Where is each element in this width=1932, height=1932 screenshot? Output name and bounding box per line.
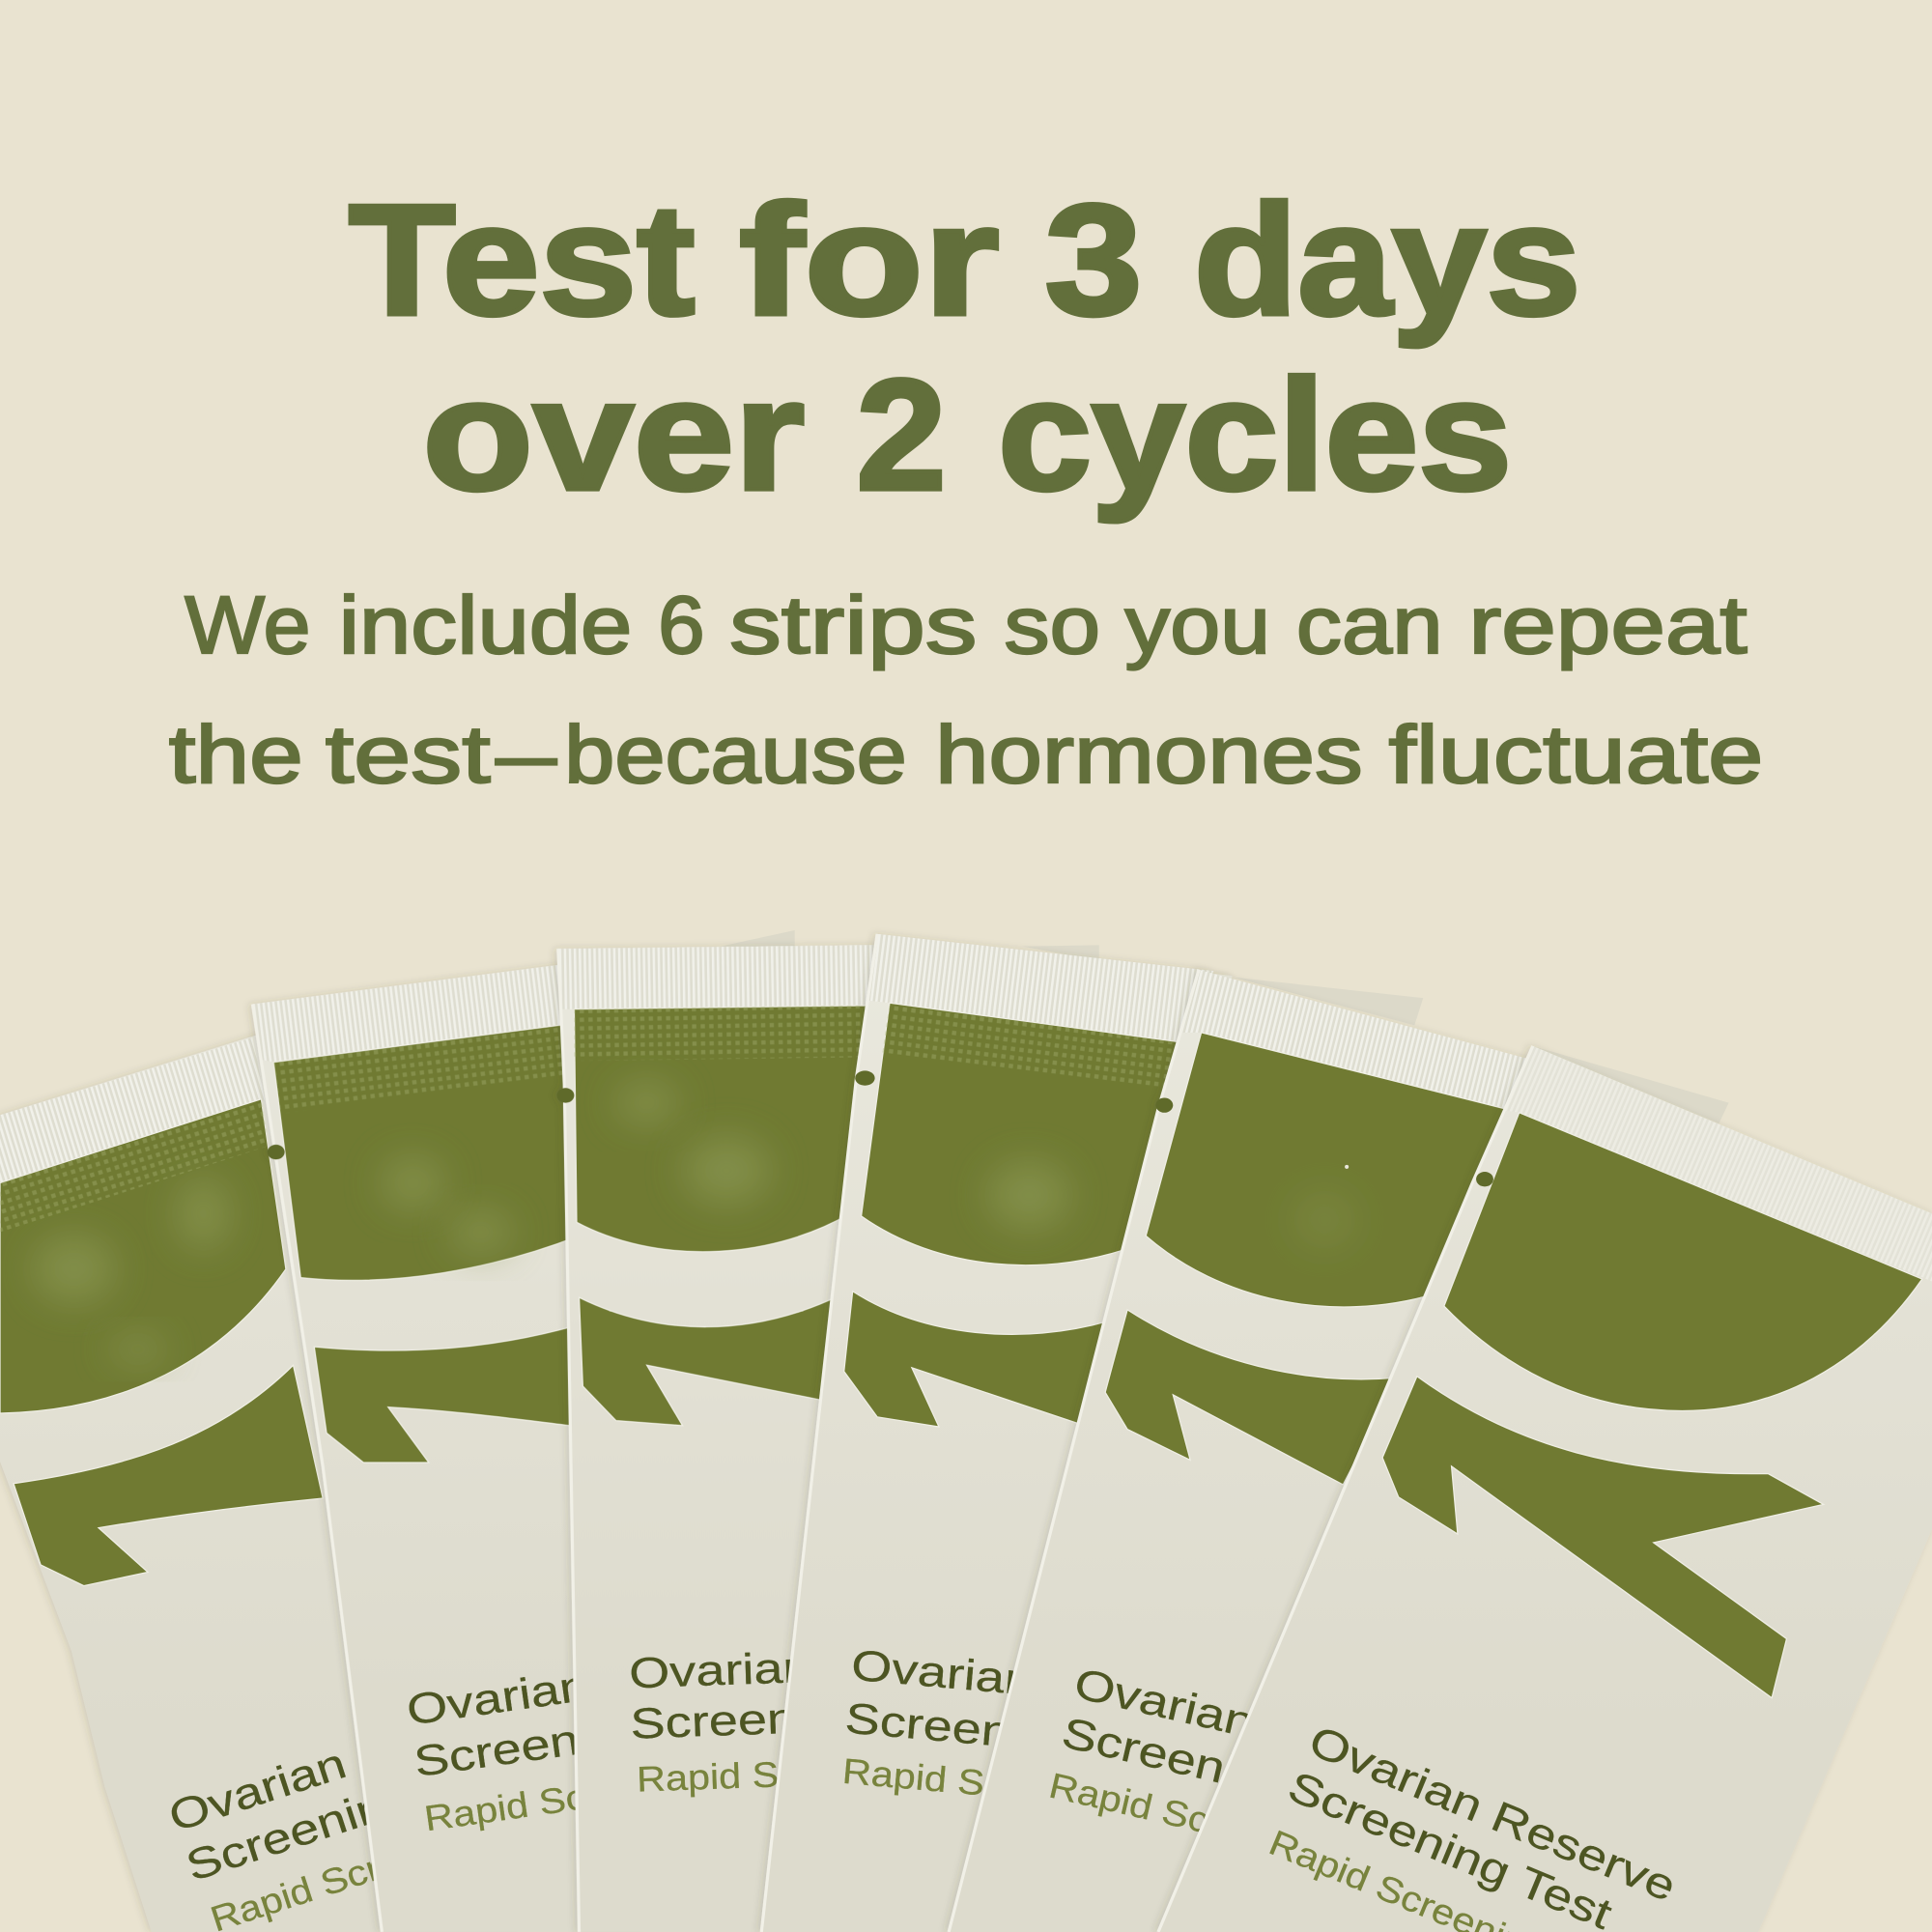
subtitle: hormones	[935, 709, 1363, 800]
icon: tear notch	[855, 1070, 875, 1086]
sachet 5: Screening Test	[1058, 1709, 1405, 1833]
sachet 3: Screening Test	[630, 1689, 977, 1748]
sachet 3: Rapid Screening	[636, 1749, 933, 1800]
sachet 2: Rapid Screening	[422, 1758, 721, 1838]
sachet 4: Rapid Screening	[840, 1751, 1139, 1816]
sachet 1: Screening Test	[181, 1739, 524, 1890]
sachet 1	[0, 1033, 551, 1932]
sachet 4: Screening Test	[843, 1695, 1192, 1773]
sachet fan	[0, 930, 1932, 1932]
title: for	[739, 171, 999, 348]
sachet 4	[761, 934, 1244, 1932]
sachet 1: Ovarian Reserve	[163, 1675, 551, 1841]
sachet 2	[252, 962, 799, 1932]
title: 2	[856, 346, 947, 523]
title	[349, 171, 1580, 523]
sachet 3: Ovarian Reserve	[628, 1636, 1021, 1697]
subtitle: you	[1125, 580, 1270, 670]
subtitle: the	[169, 709, 303, 800]
subtitle: repeat	[1468, 580, 1747, 670]
subtitle: —	[496, 709, 557, 800]
title: 3	[1045, 171, 1142, 348]
subtitle: strips	[729, 580, 977, 670]
icon: tear notch	[1476, 1172, 1493, 1186]
sachet 3	[557, 945, 1021, 1932]
sachet 6: Ovarian Reserve	[1302, 1718, 1683, 1911]
back flap of sachet 5	[1233, 977, 1423, 1025]
subtitle: fluctuate	[1389, 709, 1763, 800]
sachet 2: Screening Test	[412, 1691, 760, 1786]
subtitle: can	[1296, 580, 1443, 670]
sachet 6: Screening Test	[1282, 1763, 1619, 1932]
title: days	[1194, 171, 1580, 348]
subtitle: 6	[658, 580, 705, 670]
icon: tear notch	[1155, 1097, 1173, 1113]
sachet 5: Ovarian Reserve	[1069, 1660, 1463, 1794]
back flap of sachet 6	[1533, 1046, 1729, 1123]
sachet 5: Rapid Screening	[1045, 1766, 1343, 1870]
subtitle: include	[339, 580, 632, 670]
icon: tear notch	[557, 1088, 574, 1103]
back flap of sachet 3	[721, 930, 795, 949]
sachet 4: Ovarian Reserve	[849, 1642, 1244, 1723]
title: cycles	[998, 346, 1512, 523]
title: over	[423, 346, 805, 523]
sachet 6	[1158, 1046, 1932, 1932]
title: Test	[349, 171, 695, 348]
subtitle: because	[564, 709, 907, 800]
sachet 5	[949, 970, 1540, 1932]
subtitle: so	[1005, 580, 1100, 670]
back flap of sachet 4	[1023, 945, 1099, 961]
icon: tear notch	[268, 1145, 285, 1159]
subtitle	[169, 580, 1763, 800]
subtitle: We	[185, 580, 310, 670]
subtitle: test	[326, 709, 491, 800]
sachet 2: Ovarian Reserve	[404, 1634, 799, 1735]
